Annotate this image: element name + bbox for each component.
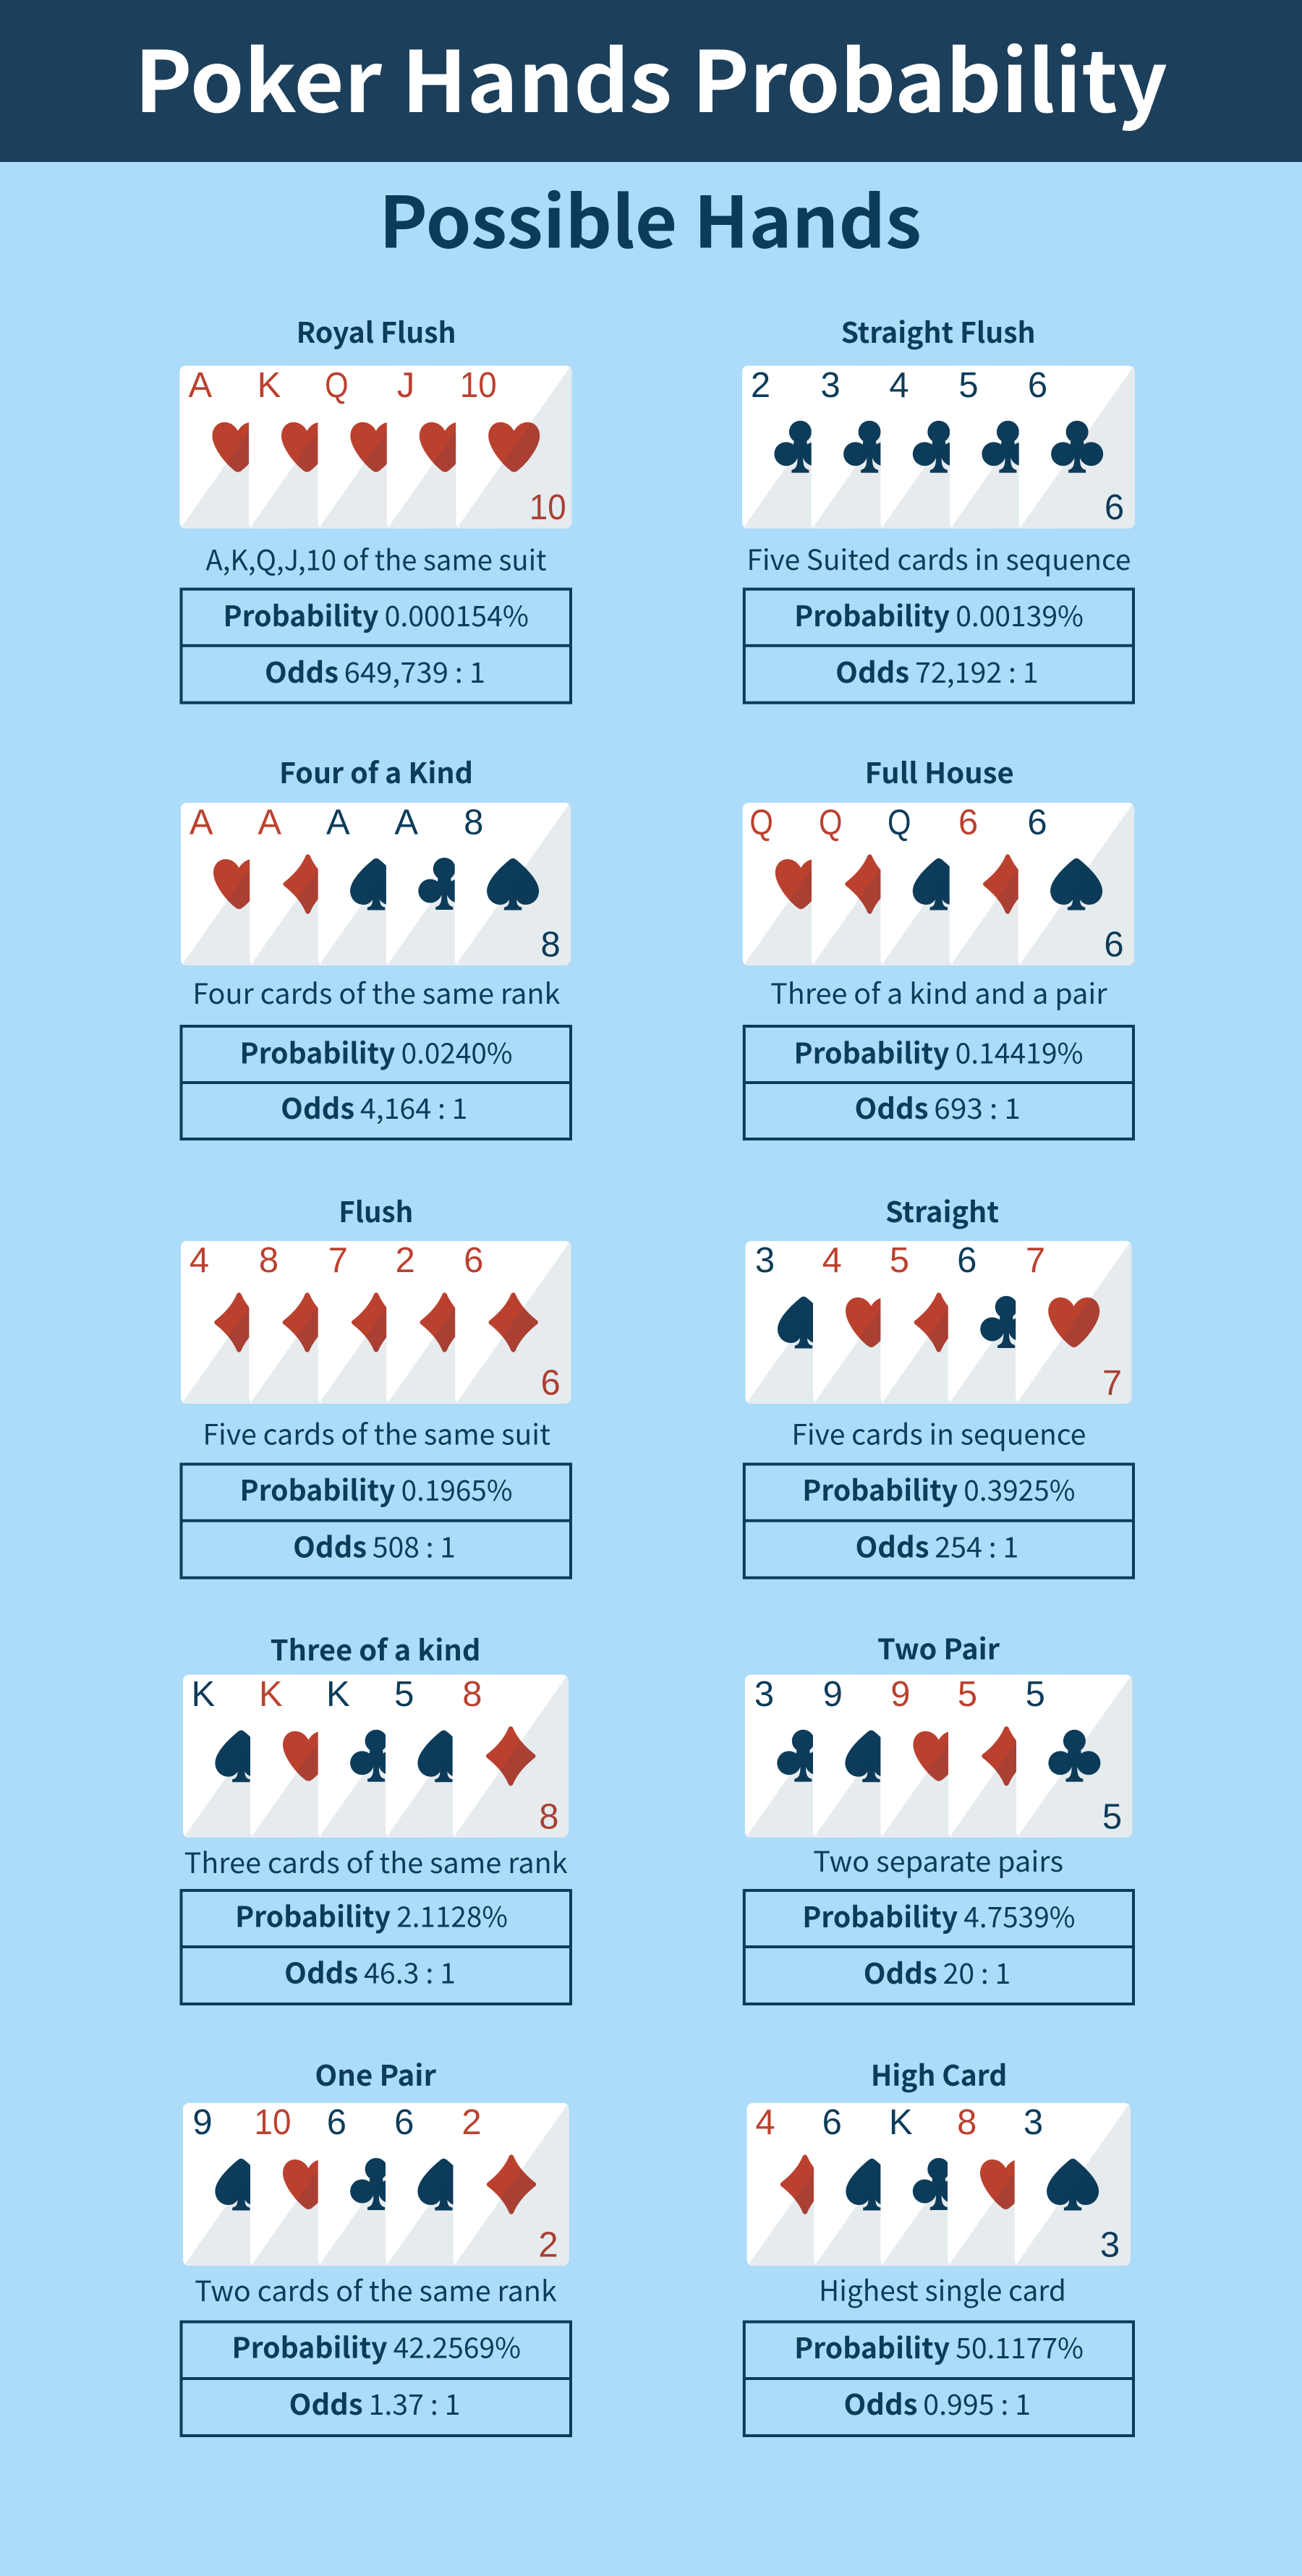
table: probability and odds: 0.995 : 1: [923, 2383, 1031, 2423]
cards: A A A A 8: 8: [464, 803, 483, 842]
cards: 9 10 6 6 2: [183, 2103, 569, 2266]
cards: A K Q J 10 of hearts: J: [397, 366, 414, 405]
cards: K K K 5 8: K: [191, 1675, 215, 1714]
heading: High Card: [871, 2054, 1007, 2094]
cards: 2 3 4 5 6 of clubs: 3: [820, 366, 841, 405]
heading: Full House: [865, 751, 1014, 792]
cards: 4 8 7 2 6 of diamonds: 2: [396, 1241, 415, 1280]
heading: Straight: [885, 1190, 999, 1231]
panel: full house: [743, 751, 1134, 1139]
table: probability and odds: 4,164 : 1: [360, 1087, 467, 1127]
table: probability and odds: Probability: [794, 594, 950, 635]
table: probability and odds: Probability: [240, 1031, 395, 1072]
cards: Q Q Q 6 6: 6: [1027, 803, 1047, 842]
table: probability and odds: Odds: [835, 651, 909, 691]
table: probability and odds: [744, 1026, 1133, 1139]
title band: [0, 0, 1302, 162]
cards: 3 9 9 5 5: 9: [823, 1675, 843, 1714]
heading: Four of a Kind: [279, 751, 473, 792]
table: probability and odds: Probability: [794, 2326, 950, 2367]
cards: K K K 5 8: [183, 1675, 569, 1838]
description: Four cards of the same rank: [192, 972, 561, 1012]
heading: possible hands: Possible Hands: [379, 166, 922, 269]
cards: 2 3 4 5 6 of clubs: 2: [751, 366, 770, 405]
cards: 9 10 6 6 2: 2: [538, 2226, 558, 2265]
cards: 9 10 6 6 2: 9: [192, 2103, 213, 2142]
table: probability and odds: [181, 1890, 571, 2004]
table: probability and odds: 0.000154%: [385, 594, 529, 635]
cards: 2 3 4 5 6 of clubs: 4: [889, 366, 909, 405]
cards: 2 3 4 5 6 of clubs: [742, 366, 1135, 529]
table: probability and odds: Odds: [284, 1951, 358, 1992]
cards: A K Q J 10 of hearts: [179, 366, 571, 529]
description: Five cards in sequence: [791, 1413, 1086, 1454]
cards: 3 4 5 6 7 mixed suits: 7: [1102, 1364, 1122, 1403]
panel: four of a kind: [181, 751, 571, 1139]
cards: 3 9 9 5 5: 9: [890, 1675, 911, 1714]
cards: 9 10 6 6 2: 6: [394, 2103, 414, 2142]
description: Three of a kind and a pair: [770, 972, 1107, 1012]
description: Five Suited cards in sequence: [746, 538, 1131, 579]
table: probability and odds: 0.14419%: [956, 1031, 1084, 1072]
table: probability and odds: [181, 589, 571, 703]
table: probability and odds: Probability: [231, 2326, 388, 2366]
heading: Flush: [339, 1190, 413, 1231]
description: A,K,Q,J,10 of the same suit: [205, 538, 547, 579]
heading: Two Pair: [877, 1627, 1000, 1668]
cards: 3 9 9 5 5: 5: [1102, 1797, 1122, 1836]
cards: 3 9 9 5 5: 5: [958, 1675, 977, 1714]
cards: A A A A 8: A: [258, 803, 281, 842]
cards: A K Q J 10 of hearts: A: [189, 366, 213, 405]
table: probability and odds: 2.1128%: [396, 1895, 508, 1935]
cards: 4 8 7 2 6 of diamonds: 7: [328, 1241, 348, 1280]
table: probability and odds: Probability: [802, 1895, 958, 1936]
table: probability and odds: Odds: [289, 2383, 363, 2423]
table: probability and odds: Probability: [235, 1895, 391, 1935]
cards: A K Q J 10 of hearts: 10: [460, 366, 497, 405]
cards: 3 4 5 6 7 mixed suits: 5: [890, 1241, 909, 1280]
table: probability and odds: Odds: [864, 1952, 937, 1992]
cards: Q Q Q 6 6: Q: [819, 803, 843, 842]
table: probability and odds: [181, 2321, 571, 2436]
table: probability and odds: [744, 589, 1133, 703]
cards: A A A A 8: A: [190, 803, 213, 842]
heading: Royal Flush: [297, 311, 456, 351]
cards: 4 6 K 8 3: 4: [755, 2103, 775, 2142]
description: Five cards of the same suit: [203, 1413, 550, 1454]
table: probability and odds: Odds: [293, 1526, 367, 1566]
heading: Straight Flush: [841, 311, 1036, 351]
panel: three of a kind: [181, 1629, 571, 2004]
table: probability and odds: [181, 1464, 571, 1578]
cards: 4 6 K 8 3: K: [889, 2103, 913, 2142]
cards: A A A A 8: [181, 803, 571, 965]
panel: royal flush: [179, 311, 571, 703]
table: probability and odds: [744, 2321, 1133, 2436]
cards: 2 3 4 5 6 of clubs: 6: [1105, 488, 1124, 527]
panel: high card: [744, 2054, 1133, 2436]
cards: A A A A 8: 8: [541, 926, 561, 965]
table: probability and odds: Odds: [281, 1087, 354, 1127]
table: probability and odds: 4.7539%: [963, 1895, 1075, 1936]
cards: Q Q Q 6 6: Q: [749, 803, 773, 842]
table: probability and odds: Probability: [223, 594, 379, 635]
table: probability and odds: [744, 1464, 1133, 1578]
table: probability and odds: Odds: [855, 1526, 929, 1566]
panel: one pair: [181, 2054, 571, 2436]
cards: 3 4 5 6 7 mixed suits: [746, 1241, 1131, 1404]
table: probability and odds: 508 : 1: [373, 1526, 456, 1566]
panel: two pair: [744, 1627, 1133, 2004]
table: probability and odds: 0.0240%: [401, 1031, 512, 1072]
table: probability and odds: 72,192 : 1: [915, 651, 1039, 691]
cards: 3 4 5 6 7 mixed suits: 6: [957, 1241, 977, 1280]
cards: K K K 5 8: 8: [462, 1675, 482, 1714]
table: probability and odds: Odds: [265, 651, 339, 691]
table: probability and odds: Probability: [794, 1031, 949, 1072]
table: probability and odds: Probability: [802, 1469, 958, 1509]
cards: K K K 5 8: K: [326, 1675, 350, 1714]
description: Two cards of the same rank: [195, 2269, 557, 2310]
panel: flush: [181, 1190, 571, 1578]
table: probability and odds: Odds: [843, 2383, 917, 2423]
cards: 4 8 7 2 6 of diamonds: 4: [190, 1241, 209, 1280]
table: probability and odds: 254 : 1: [935, 1526, 1018, 1566]
table: probability and odds: Odds: [855, 1087, 929, 1127]
description: Two separate pairs: [813, 1840, 1063, 1880]
table: probability and odds: Probability: [240, 1469, 395, 1509]
cards: A A A A 8: A: [326, 803, 350, 842]
cards: Q Q Q 6 6: 6: [1104, 926, 1124, 965]
table: probability and odds: 0.00139%: [956, 594, 1084, 635]
cards: 3 9 9 5 5: 5: [1026, 1675, 1045, 1714]
table: probability and odds: 0.3925%: [963, 1469, 1075, 1509]
cards: 3 4 5 6 7 mixed suits: 4: [822, 1241, 842, 1280]
table: probability and odds: 46.3 : 1: [364, 1951, 456, 1992]
cards: Q Q Q 6 6: Q: [888, 803, 911, 842]
cards: 3 4 5 6 7 mixed suits: 7: [1026, 1241, 1045, 1280]
cards: K K K 5 8: 8: [539, 1797, 559, 1836]
cards: K K K 5 8: 5: [394, 1675, 414, 1714]
table: probability and odds: 42.2569%: [393, 2326, 521, 2366]
title band: Poker Hands Probability: [135, 14, 1167, 137]
table: probability and odds: 20 : 1: [943, 1952, 1010, 1992]
table: probability and odds: [744, 1890, 1133, 2004]
table: probability and odds: 649,739 : 1: [344, 651, 485, 691]
cards: 3 4 5 6 7 mixed suits: 3: [755, 1241, 775, 1280]
cards: 4 6 K 8 3: [746, 2103, 1131, 2266]
cards: A K Q J 10 of hearts: Q: [325, 366, 349, 405]
cards: A K Q J 10 of hearts: K: [258, 366, 281, 405]
cards: K K K 5 8: K: [259, 1675, 283, 1714]
table: probability and odds: [181, 1026, 571, 1139]
table: probability and odds: 1.37 : 1: [369, 2383, 460, 2423]
cards: Q Q Q 6 6: 6: [958, 803, 978, 842]
cards: A A A A 8: A: [394, 803, 418, 842]
cards: 9 10 6 6 2: 2: [461, 2103, 482, 2142]
panel: straight: [744, 1190, 1133, 1578]
cards: 9 10 6 6 2: 6: [327, 2103, 346, 2142]
cards: 2 3 4 5 6 of clubs: 6: [1028, 366, 1047, 405]
panel: straight flush: [742, 311, 1135, 703]
cards: 4 8 7 2 6 of diamonds: 8: [259, 1241, 278, 1280]
cards: 4 6 K 8 3: 8: [957, 2103, 977, 2142]
cards: 4 8 7 2 6 of diamonds: 6: [464, 1241, 483, 1280]
table: probability and odds: 50.1177%: [956, 2326, 1084, 2367]
table: probability and odds: 0.1965%: [401, 1469, 512, 1509]
cards: 2 3 4 5 6 of clubs: 5: [958, 366, 979, 405]
cards: Q Q Q 6 6: [743, 803, 1134, 965]
table: probability and odds: 693 : 1: [934, 1087, 1021, 1127]
cards: 9 10 6 6 2: 10: [255, 2103, 291, 2142]
cards: 4 6 K 8 3: 3: [1024, 2103, 1043, 2142]
heading: Three of a kind: [271, 1629, 480, 1669]
cards: 4 8 7 2 6 of diamonds: [181, 1241, 571, 1404]
description: Three cards of the same rank: [184, 1841, 568, 1882]
description: Highest single card: [819, 2269, 1066, 2310]
cards: 4 6 K 8 3: 6: [822, 2103, 842, 2142]
cards: 3 9 9 5 5: [745, 1675, 1132, 1838]
heading: One Pair: [315, 2054, 437, 2094]
cards: 3 9 9 5 5: 3: [754, 1675, 774, 1714]
cards: 4 6 K 8 3: 3: [1100, 2226, 1120, 2265]
cards: 4 8 7 2 6 of diamonds: 6: [541, 1364, 561, 1403]
cards: A K Q J 10 of hearts: 10: [529, 488, 566, 527]
